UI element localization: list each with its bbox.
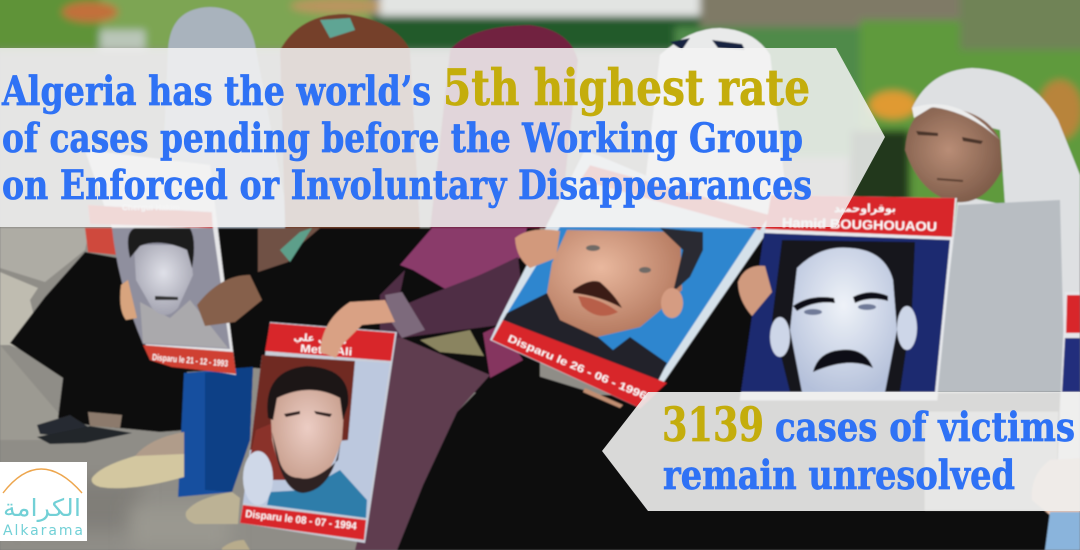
- line 3: on Enforced or Involuntary Disappearances: [2, 162, 812, 209]
- portrait poster: Metaï Ali: Disparu le 08 - 07 - 1994: [245, 508, 357, 533]
- line 1: Algeria has the world’s: [1, 68, 431, 115]
- garden, hedges and building: [0, 0, 1080, 230]
- logo arabic wordmark: الكرامة: [3, 494, 81, 522]
- panel: bottom arrow banner: [602, 392, 1080, 511]
- line 1: [1, 58, 810, 117]
- portrait poster: Metaï Ali: Metaï Ali: [300, 343, 353, 359]
- right poster edge and hand: [925, 292, 1080, 550]
- maroon dress: [355, 228, 527, 550]
- portrait poster: Metaï Ali: [240, 300, 397, 543]
- number 3139: 3139: [662, 398, 764, 453]
- heading text: Algeria statistic: [1, 58, 812, 209]
- portrait poster: Chergui Hakim: Chergui Hakim: [122, 203, 180, 212]
- black robes in foreground: [397, 228, 1080, 550]
- portrait poster: Hamid Boughouaou: [738, 195, 957, 400]
- line 2: of cases pending before the Working Group: [2, 115, 803, 162]
- line 1: 5th highest rate: [443, 58, 810, 117]
- panel: top arrow banner: [0, 48, 885, 227]
- logo arc: [3, 469, 82, 493]
- logo latin wordmark: Alkarama: [3, 523, 83, 539]
- portrait poster: Chergui Hakim: Disparu le 21 - 12 - 1993: [152, 352, 228, 369]
- portrait poster: Metaï Ali: مطاي علي: [293, 332, 347, 347]
- portrait poster: Hamid Boughouaou: Hamid BOUGHOUAOU: [782, 215, 937, 234]
- remain unresolved: remain unresolved: [663, 452, 1015, 499]
- logo: Alkarama: [0, 462, 87, 541]
- dark clothing and trousers: [10, 228, 540, 497]
- callout text: 3139 unresolved cases: [662, 398, 1075, 499]
- shoes and feet: [92, 432, 250, 550]
- headscarves above the banner: [160, 7, 790, 228]
- right woman: hijab and face: [905, 68, 1080, 392]
- portrait poster: Chergui Hakim: [85, 150, 262, 375]
- portrait poster: Disparu le 26-06-1996: [490, 150, 770, 408]
- portrait poster: Hamid Boughouaou: بوقراوحميد: [834, 202, 896, 215]
- portrait poster: Disparu le 26-06-1996: Disparu le 26 - 06 - 1996: [506, 333, 649, 402]
